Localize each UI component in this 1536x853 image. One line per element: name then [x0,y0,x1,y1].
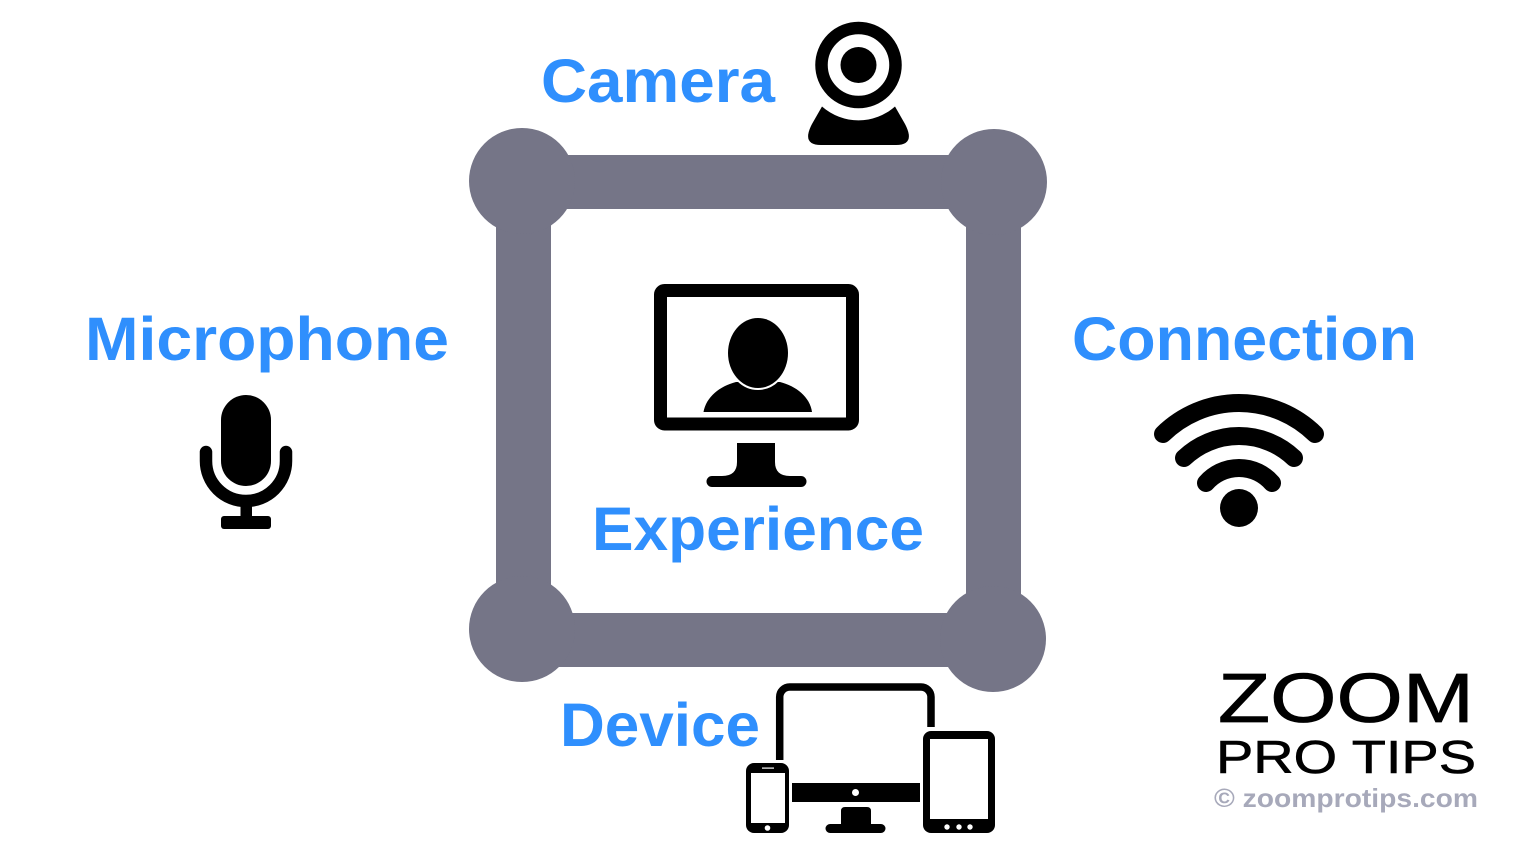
heading: Connection: Connection [1072,305,1417,373]
logo text: ZOOM: ZOOM [1218,659,1474,737]
panel: square frame with corner nodes [469,128,1047,692]
logo: Zoom Pro Tips [1214,659,1478,813]
icon: devices [746,687,995,833]
heading: Experience: Experience [592,495,924,563]
heading: Microphone: Microphone [85,305,449,373]
heading: Camera: Camera [541,47,776,115]
icon: webcam [808,28,909,145]
logo text: PRO TIPS: PRO TIPS [1216,731,1476,783]
copyright: zoomprotips.com: © zoomprotips.com [1214,783,1478,813]
heading: Device: Device [560,691,760,759]
icon: microphone [206,395,286,529]
icon: monitor with person [660,290,852,487]
icon: wifi [1163,403,1315,527]
